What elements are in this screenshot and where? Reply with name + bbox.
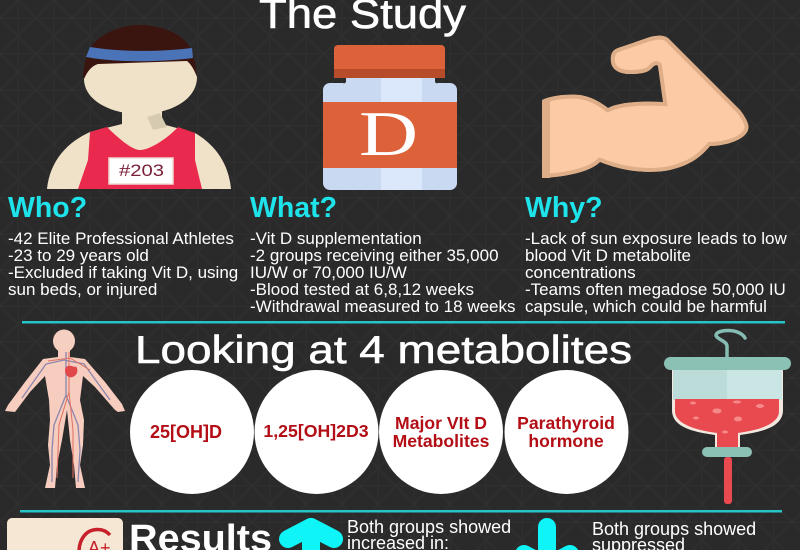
circle: parathyroid hormone: Parathyroid: [517, 413, 615, 433]
circle: 1,25[OH]2D3: 1,25[OH]2D3: [263, 421, 369, 441]
icon: athlete: #203: [119, 161, 164, 180]
text block: who: -42 Elite Professional Athletes: [8, 229, 234, 248]
text block: why: -Lack of sun exposure leads to low: [525, 229, 787, 248]
circle: 25[OH]D: [130, 370, 254, 494]
heading: what: What?: [250, 192, 337, 224]
text block: what: -Vit D supplementation: [250, 229, 422, 248]
panel: who: [8, 192, 238, 299]
icon: graded paper: [7, 518, 123, 550]
heading: why: Why?: [525, 192, 603, 224]
icon: vitamin D bottle: [323, 45, 457, 190]
text block: what: -Withdrawal measured to 18 weeks: [250, 297, 516, 316]
circle: major vit D metabolites: [379, 370, 503, 494]
icon: human circulatory figure: [5, 330, 125, 488]
panel: why: [525, 192, 787, 316]
text block: who: -Excluded if taking Vit D, using: [8, 263, 238, 282]
heading: who: Who?: [8, 192, 87, 224]
text: increased: Both groups showed: [347, 517, 511, 537]
icon: flexed arm: [542, 36, 749, 178]
text block: what: -Blood tested at 6,8,12 weeks: [250, 280, 474, 299]
text block: what: IU/W or 70,000 IU/W: [250, 263, 407, 282]
circle: 25[OH]D: 25[OH]D: [150, 422, 222, 442]
icon: up arrow: [288, 527, 334, 550]
icon: down arrow: [524, 527, 570, 550]
text: suppressed: Both groups showed: [592, 519, 756, 539]
heading: metabolites: Looking at 4 metabolites: [135, 329, 632, 372]
panel: what: [250, 192, 516, 316]
circle: major vit D metabolites: Major VIt D: [395, 413, 487, 433]
text block: why: blood Vit D metabolite: [525, 246, 691, 265]
icon: blood bag: [664, 330, 791, 504]
circle: major vit D metabolites: Metabolites: [393, 431, 490, 451]
text block: what: -2 groups receiving either 35,000: [250, 246, 499, 265]
text block: why: concentrations: [525, 263, 636, 282]
text block: who: -23 to 29 years old: [8, 246, 149, 265]
icon: athlete: [47, 25, 231, 189]
text block: why: capsule, which could be harmful: [525, 297, 767, 316]
metabolite circles: [130, 370, 628, 494]
text block: why: -Teams often megadose 50,000 IU: [525, 280, 786, 299]
circle: 1,25[OH]2D3: [254, 370, 378, 494]
text block: who: sun beds, or injured: [8, 280, 157, 299]
circle: parathyroid hormone: [504, 370, 628, 494]
icon: vitamin D bottle: D: [359, 99, 418, 169]
circle: parathyroid hormone: hormone: [528, 431, 604, 451]
